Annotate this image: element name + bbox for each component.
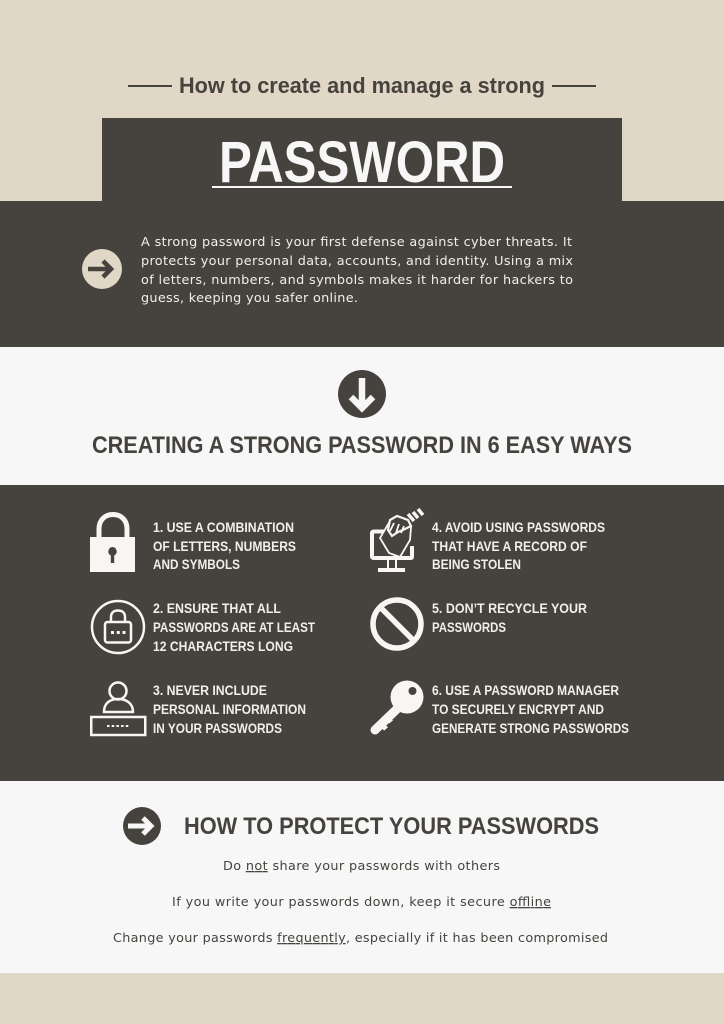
item 2 text: 2. ENSURE THAT ALL [153,601,281,616]
panel: creating heading [0,347,724,485]
section heading: CREATING A STRONG PASSWORD IN 6 EASY WAYS [92,432,632,459]
item 1 text: AND SYMBOLS [153,557,240,572]
icon: circled lock [92,601,144,653]
tip 1: Do not share your passwords with others [223,859,500,874]
subtitle with side rules: How to create and manage a strong [179,73,545,98]
item 6 text: 6. USE A PASSWORD MANAGER [432,683,619,698]
item 1 text [153,520,296,572]
panel: protect passwords [0,781,724,973]
item 1 text: 1. USE A COMBINATION [153,520,294,535]
item 2 text: PASSWORDS ARE AT LEAST [153,620,316,635]
intro paragraph [141,235,573,306]
item 2 text: 12 CHARACTERS LONG [153,639,293,654]
item 3 text: IN YOUR PASSWORDS [153,721,282,736]
intro paragraph: A strong password is your first defense against cyber threats. It [141,235,572,250]
item 6 text [432,683,629,736]
section heading: HOW TO PROTECT YOUR PASSWORDS [184,813,599,840]
item 1 text: OF LETTERS, NUMBERS [153,539,296,554]
header dark tab and band [0,118,724,347]
icon: padlock [90,514,135,572]
panel: header [0,73,724,347]
title: PASSWORD [219,130,505,195]
item 3 text [153,683,306,736]
item 3 text: PERSONAL INFORMATION [153,702,306,717]
tip 3: Change your passwords frequently, especially if it has been compromised [113,931,608,946]
icon: right arrow beige [82,249,122,289]
icon: key [375,680,424,730]
item 2 text [153,601,316,654]
icon: stolen password monitor [372,509,423,572]
item 5 text [432,601,587,635]
item 3 text: 3. NEVER INCLUDE [153,683,267,698]
icon: no symbol [373,600,421,648]
icon: right arrow dark [123,807,161,845]
icon: down arrow [338,370,386,418]
intro paragraph: of letters, numbers, and symbols makes it harder for hackers to [141,273,573,288]
item 4 text: BEING STOLEN [432,557,521,572]
panel: six ways [0,485,724,781]
intro paragraph: guess, keeping you safer online. [141,291,358,306]
item 5 text: 5. DON’T RECYCLE YOUR [432,601,587,616]
intro paragraph: protects your personal data, accounts, and identity. Using a mix [141,254,573,269]
item 4 text: 4. AVOID USING PASSWORDS [432,520,605,535]
item 5 text: PASSWORDS [432,620,506,635]
item 6 text: TO SECURELY ENCRYPT AND [432,702,604,717]
item 4 text [432,520,605,572]
item 4 text: THAT HAVE A RECORD OF [432,539,587,554]
item 6 text: GENERATE STRONG PASSWORDS [432,721,629,736]
icon: user with password field [91,682,145,735]
tip 2: If you write your passwords down, keep it secure offline [172,895,551,910]
